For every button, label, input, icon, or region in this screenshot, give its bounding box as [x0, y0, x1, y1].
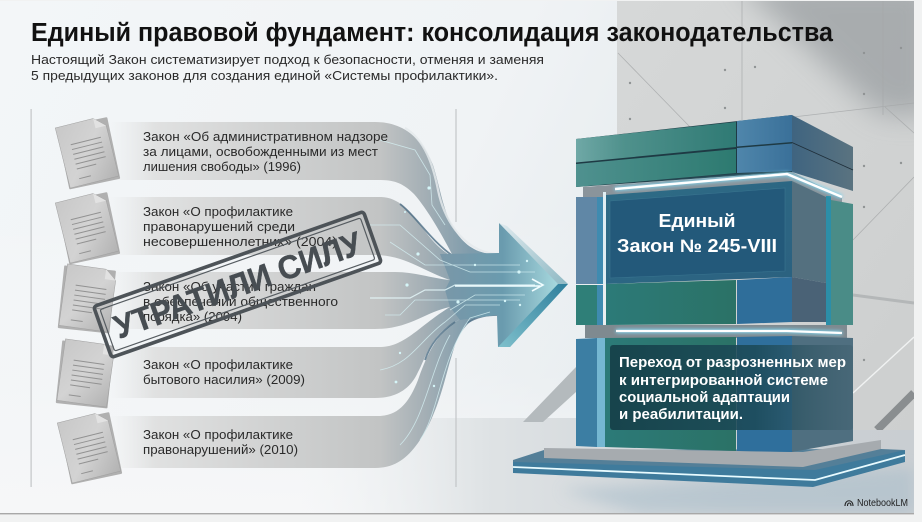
logo icon [845, 501, 853, 506]
middle strip [597, 285, 603, 325]
law 4 text [143, 357, 305, 387]
law 2 text: несовершеннолетних» (2004) [143, 234, 337, 249]
stream 5 [110, 285, 520, 468]
top cap upper front [576, 122, 736, 162]
base slab top [513, 449, 905, 470]
grey band [585, 325, 847, 338]
left vertical rule [30, 109, 32, 487]
circuit traces [370, 140, 535, 445]
middle side block [792, 277, 826, 322]
law 1 text [143, 129, 388, 174]
under cap shadow [583, 172, 842, 210]
arrow [370, 140, 568, 445]
top cap blue lower [737, 144, 792, 173]
arrow bottom bevel [498, 284, 568, 347]
floor reflection [560, 468, 914, 513]
lower strip [597, 338, 605, 447]
monolith [576, 115, 853, 452]
right pillar [831, 200, 853, 325]
blue base slab [513, 450, 905, 487]
law 3 text: порядка» (2004) [143, 309, 242, 324]
upper front [606, 181, 792, 284]
white front edge [603, 192, 606, 284]
title plaque: Закон № 245-VIII [617, 236, 777, 256]
lower background fade [0, 200, 617, 513]
stream 4 [110, 285, 520, 398]
concrete wall [617, 0, 922, 431]
law 4 text: бытового насилия» (2009) [143, 372, 305, 387]
upper left pillar [576, 197, 597, 284]
title: Единый правовой фундамент: консолидация законодательства [31, 19, 834, 47]
description panel: Переход от разрозненных мер [619, 354, 846, 371]
upper side face [792, 181, 826, 283]
top cap side [792, 115, 853, 191]
description panel [610, 345, 853, 430]
stream 3 [110, 272, 520, 329]
monolith base platform [513, 440, 905, 487]
document icon 1 [54, 115, 122, 191]
right vertical rule [455, 109, 457, 487]
right glow strip [826, 196, 831, 326]
stream 2 [110, 197, 520, 285]
lower left pillar [576, 338, 597, 447]
document icon 5 [56, 410, 124, 486]
subtitle: Настоящий Закон систематизирует подход к безопасности, отменяя и заменяя [31, 53, 544, 67]
stream 1 [110, 122, 520, 285]
title plaque: Единый [658, 211, 736, 231]
cap glow halo [615, 174, 842, 197]
document icon 3 [56, 263, 118, 335]
flow streams [110, 122, 520, 468]
law 5 text: правонарушений» (2010) [143, 442, 298, 457]
law 1 text: за лицами, освобожденными из мест [143, 144, 378, 159]
law 1 text: лишения свободы» (1996) [143, 159, 301, 174]
upper left glow strip [597, 197, 603, 284]
stream dark edges [400, 204, 497, 360]
middle blue block [737, 277, 792, 324]
bottom frame line [0, 513, 914, 514]
floor [300, 418, 914, 513]
law 3 text [143, 279, 338, 324]
lower green block [605, 337, 736, 451]
middle green block [606, 280, 736, 325]
lower glow strip [616, 331, 842, 333]
law 3 text: в обеспечении общественного [143, 294, 338, 309]
law 5 text: Закон «О профилактике [143, 427, 293, 442]
document icon 2 [54, 190, 122, 266]
title plaque [610, 188, 785, 278]
stream edge highlights [405, 128, 495, 254]
description panel: к интегрированной системе [619, 372, 828, 389]
law 3 text: Закон «Об участии граждан [143, 279, 316, 294]
cap glow strip [615, 174, 842, 197]
document icon 4 [54, 338, 116, 410]
arrow top bevel [499, 223, 568, 284]
law 2 text: Закон «О профилактике [143, 204, 293, 219]
law 5 text [143, 427, 298, 457]
circuit nodes [395, 186, 528, 387]
arrow body [440, 223, 568, 347]
main arrow line [455, 279, 543, 291]
lower glow halo [616, 331, 842, 333]
diagonal strut [523, 367, 576, 422]
lower side block [792, 336, 853, 452]
top cap backing [576, 115, 792, 187]
subtitle [31, 53, 544, 83]
law 2 text [143, 204, 337, 249]
base glow line [513, 455, 905, 480]
law 4 text: Закон «О профилактике [143, 357, 293, 372]
law 1 text: Закон «Об административном надзоре [143, 129, 388, 144]
top cap lower front [576, 149, 736, 187]
description panel: и реабилитации. [619, 406, 743, 423]
NotebookLM logo: NotebookLM [857, 498, 908, 509]
subtitle: 5 предыдущих законов для создания единой «Системы профилактики». [31, 69, 498, 83]
description panel: социальной адаптации [619, 389, 790, 406]
law 2 text: правонарушений среди [143, 219, 295, 234]
stamp: УТРАТИЛИ СИЛУ [109, 224, 367, 346]
top cap blue upper [737, 115, 792, 146]
lower blue block [737, 336, 792, 452]
middle left block [576, 285, 597, 325]
grey slab [544, 440, 881, 467]
